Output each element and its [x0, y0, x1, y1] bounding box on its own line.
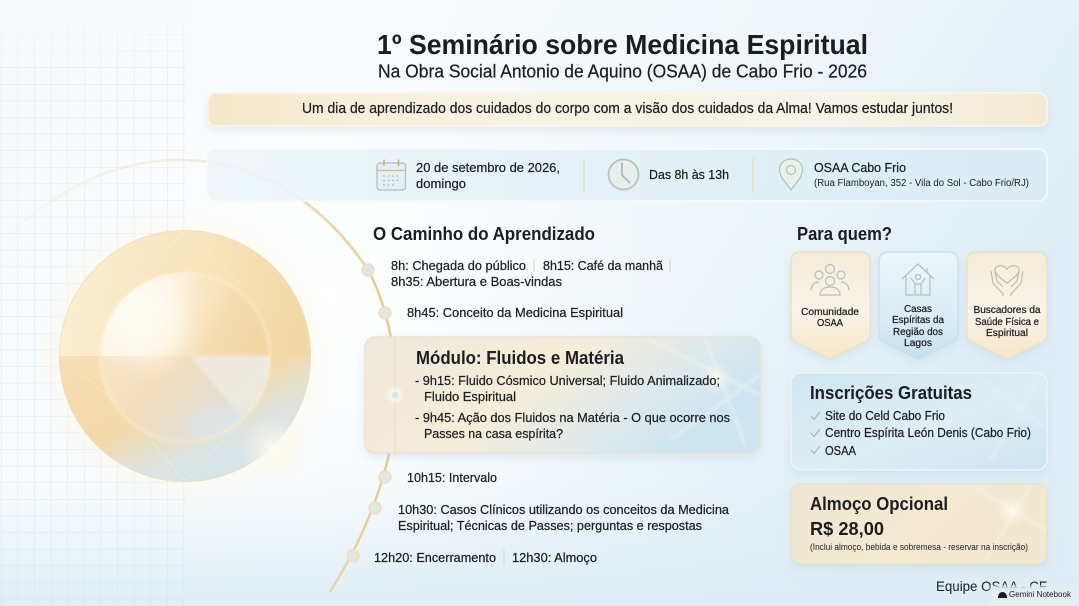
timeline item: casos clínicos: 10h30: Casos Clínicos utilizando os conceitos da Medicina: [398, 502, 730, 517]
card: casas espíritas: Casas: [904, 304, 932, 315]
panel: inscrições gratuitas: Inscrições Gratuitas: [810, 383, 972, 403]
timeline item: chegada: [362, 258, 670, 289]
panel: inscrições gratuitas: [791, 373, 1047, 470]
location text: (Rua Flamboyan, 352 - Vila do Sol - Cabo Frio/RJ): [814, 178, 1029, 189]
card: casas espíritas: [879, 252, 958, 358]
timeline item: casos clínicos: Espiritual; Técnicas de Passes; perguntas e respostas: [398, 518, 702, 533]
panel: módulo fluidos e matéria: Módulo: Fluidos e Matéria: [416, 348, 625, 368]
panel: para quem: [791, 224, 1047, 358]
banner: Um dia de aprendizado dos cuidados do corpo com a visão dos cuidados da Alma! Vamos estudar juntos!: [302, 101, 953, 117]
timeline item: encerramento: 12h30: Almoço: [512, 550, 597, 565]
panel: almoço opcional: (Inclui almoço, bebida e sobremesa - reservar na inscrição): [810, 542, 1028, 552]
card: casas espíritas: Lagos: [904, 338, 932, 349]
panel: módulo fluidos e matéria: [365, 337, 760, 453]
title: 1º Seminário sobre Medicina Espiritual: [377, 29, 868, 60]
checklist: [811, 408, 1031, 458]
checklist: OSAA: [825, 443, 856, 458]
icon: calendar: [377, 160, 406, 190]
timeline arc: [8, 160, 396, 592]
panel: almoço opcional: R$ 28,00: [810, 519, 884, 539]
date text: [416, 160, 560, 191]
panel: almoço opcional: Almoço Opcional: [810, 494, 948, 514]
timeline item: encerramento: 12h20: Encerramento: [374, 550, 496, 565]
location text: [814, 160, 1029, 189]
central glass orb: [51, 224, 315, 490]
timeline item: chegada: 8h: Chegada do público: [391, 258, 526, 273]
icon: location pin: [780, 159, 802, 190]
watermark: gemini notebook: Gemini Notebook: [1009, 590, 1072, 599]
icon: hands holding heart: [991, 266, 1023, 296]
card: casas espíritas: Espíritas da: [892, 315, 944, 326]
date text: domingo: [416, 176, 466, 191]
checklist: Centro Espírita León Denis (Cabo Frio): [825, 425, 1031, 440]
timeline item: casos clínicos: [369, 502, 730, 533]
event info bar: [207, 149, 1047, 201]
timeline item: intervalo: 10h15: Intervalo: [407, 470, 497, 485]
heading: O Caminho do Aprendizado: O Caminho do Aprendizado: [373, 224, 595, 244]
card: comunidade OSAA: Comunidade: [801, 307, 859, 318]
timeline item: encerramento: [347, 550, 597, 566]
card: buscadores: Saúde Física e: [975, 317, 1039, 328]
icon: house with person: [902, 264, 934, 295]
card: buscadores: Espiritual: [986, 328, 1028, 339]
card: buscadores: [967, 252, 1047, 358]
timeline item: conceito: 8h45: Conceito da Medicina Espiritual: [407, 305, 623, 320]
date text: 20 de setembro de 2026,: [416, 160, 560, 175]
panel: módulo fluidos e matéria: Passes na casa espírita?: [424, 426, 563, 441]
watermark: gemini notebook: [990, 586, 1079, 606]
panel: timeline: [347, 224, 760, 566]
card: comunidade OSAA: [791, 252, 870, 358]
card: buscadores: Buscadores da: [974, 305, 1041, 316]
icon: clock: [608, 160, 638, 190]
card: casas espíritas: Região dos: [893, 327, 943, 338]
panel: módulo fluidos e matéria: Fluido Espiritual: [424, 389, 516, 404]
subtitle: Na Obra Social Antonio de Aquino (OSAA) de Cabo Frio - 2026: [378, 62, 867, 82]
card: comunidade OSAA: OSAA: [817, 318, 843, 329]
checklist: Site do Celd Cabo Frio: [825, 408, 945, 423]
footer: equipe: Equipe OSAA - CF: [936, 578, 1047, 594]
icon: people: [811, 264, 849, 295]
time text: Das 8h às 13h: [649, 167, 729, 182]
location text: OSAA Cabo Frio: [814, 160, 906, 175]
panel: módulo fluidos e matéria: - 9h45: Ação dos Fluidos na Matéria - O que ocorre nos: [415, 410, 730, 425]
banner: [208, 93, 1047, 126]
timeline item: chegada: 8h15: Café da manhã: [543, 258, 664, 273]
timeline item: chegada: 8h35: Abertura e Boas-vindas: [391, 274, 562, 289]
panel: almoço opcional: [791, 484, 1047, 564]
heading: Para quem?: Para quem?: [797, 224, 892, 244]
panel: módulo fluidos e matéria: - 9h15: Fluido Cósmico Universal; Fluido Animalizado;: [415, 373, 720, 388]
